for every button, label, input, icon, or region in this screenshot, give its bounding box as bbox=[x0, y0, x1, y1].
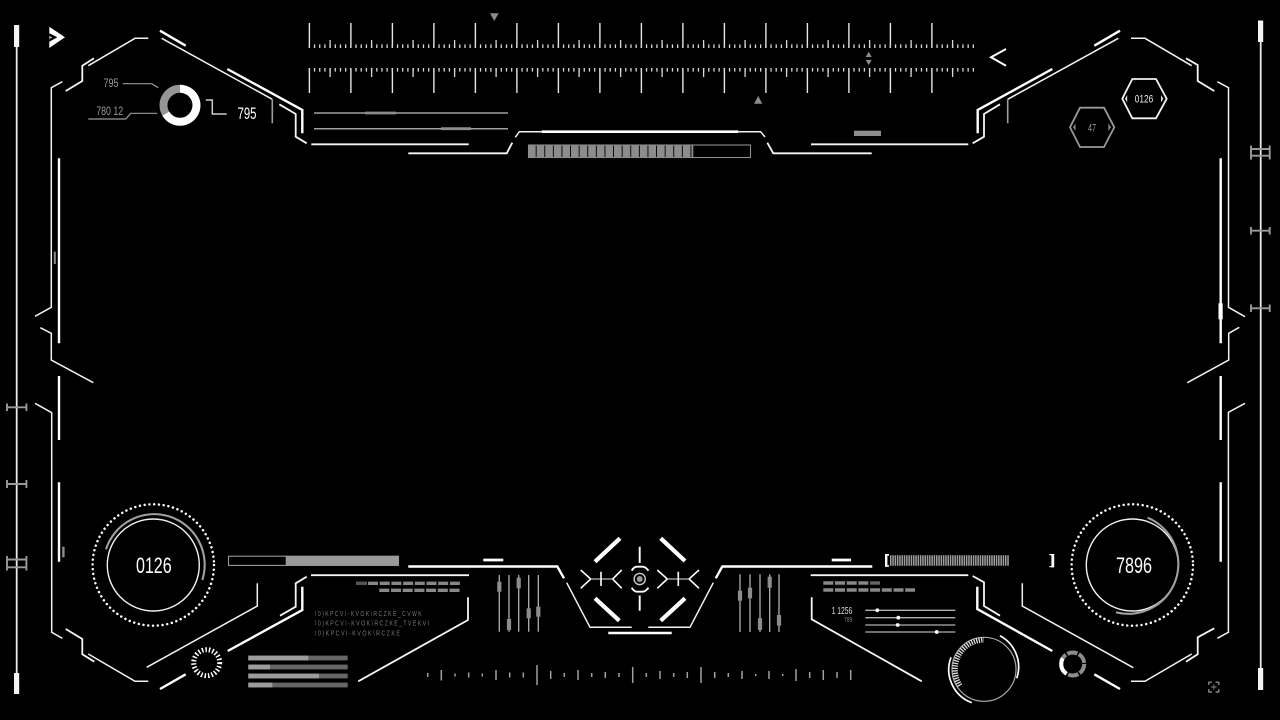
left edge rail bbox=[7, 25, 27, 694]
segmented ring bbox=[1061, 652, 1084, 676]
bottom-right frame bbox=[716, 560, 1214, 689]
value 795: 795 bbox=[238, 105, 256, 123]
ruler markers bbox=[490, 13, 872, 104]
dashes bbox=[823, 583, 915, 590]
donut chart bbox=[163, 89, 196, 122]
gray tab bbox=[854, 131, 881, 136]
right dial 7896 bbox=[1072, 504, 1193, 626]
right sliders bbox=[738, 574, 781, 632]
right bracket bbox=[1049, 554, 1054, 567]
hexagon 47 bbox=[1070, 108, 1114, 147]
top-right frame bbox=[973, 31, 1245, 317]
label 795: 795 bbox=[104, 78, 118, 90]
top ruler bbox=[309, 36, 974, 46]
bottom-left bar gauge bbox=[228, 556, 399, 566]
small code text: I 0 ) K P C V I - K V O K \ R C Z K E _ C V W K bbox=[315, 611, 422, 618]
left sliders bbox=[497, 575, 540, 632]
value 1 1256: 1 1256 bbox=[832, 605, 852, 617]
right frame side bbox=[1187, 158, 1245, 638]
top gray lines bbox=[314, 113, 508, 129]
bottom ruler bbox=[309, 70, 974, 80]
icon: chevron left bbox=[991, 49, 1006, 66]
small code text: I 0 ) K P C V I - K V O K \ R C Z K E bbox=[315, 630, 400, 637]
center targeting reticle bbox=[567, 538, 713, 633]
left data dashes bbox=[356, 583, 460, 590]
icon: focus corners bbox=[1209, 682, 1219, 692]
left dial 0126 bbox=[93, 504, 214, 626]
right edge rail bbox=[1251, 20, 1270, 690]
hexagon 0126: 0126 bbox=[1135, 94, 1153, 106]
top progress bar bbox=[528, 145, 750, 158]
value 789: 789 bbox=[844, 615, 852, 624]
stacked progress bars bbox=[248, 656, 348, 687]
icon: play arrow bbox=[49, 27, 65, 48]
left dial 0126: 0126 bbox=[136, 553, 172, 578]
bottom-right data readout bbox=[823, 583, 955, 634]
icon: radial spinner bbox=[194, 650, 220, 676]
left frame side bbox=[35, 158, 93, 638]
hexagon 0126 bbox=[1122, 79, 1167, 118]
top-left frame bbox=[35, 31, 968, 316]
hexagon 47: 47 bbox=[1088, 122, 1096, 134]
right dial 7896: 7896 bbox=[1116, 553, 1152, 578]
label 780 12: 780 12 bbox=[96, 106, 123, 118]
circular hatched gauge bbox=[949, 636, 1019, 703]
striped level bar bbox=[885, 554, 1009, 567]
small code text bbox=[315, 611, 429, 637]
horizontal sliders bbox=[865, 608, 955, 634]
bottom-left frame bbox=[66, 560, 564, 689]
top-left gauge labels and donut bbox=[88, 78, 256, 123]
bottom tick ruler bbox=[428, 665, 851, 685]
small code text: I 0 ) K P C V I - K V O K \ R C Z K E _ T V E K V I bbox=[315, 621, 429, 628]
